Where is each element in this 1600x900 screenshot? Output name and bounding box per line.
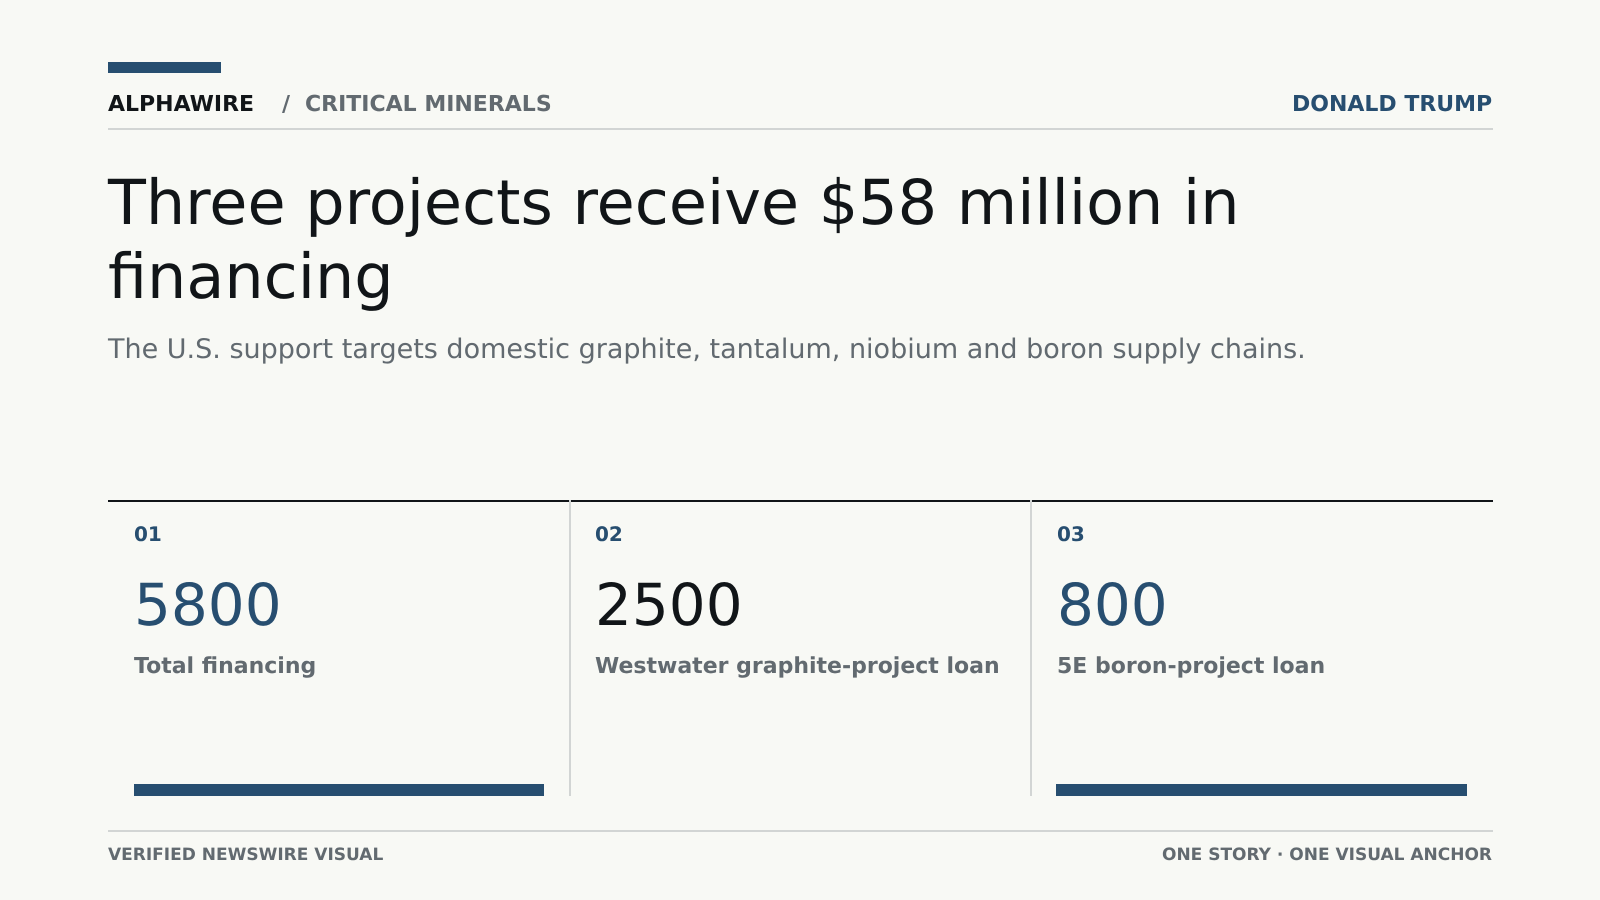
title: financing [108,240,394,313]
index 03: 03 [1057,522,1085,546]
panel: Westwater loan [595,522,1000,679]
value 5800: 5800 [134,571,282,639]
title [108,166,1240,313]
index 01: 01 [134,522,162,546]
bar [1056,784,1467,796]
header section: CRITICAL MINERALS [305,92,552,117]
header subject: DONALD TRUMP [1292,92,1492,117]
bar [134,784,544,796]
panel: 5E boron loan [1056,522,1467,796]
subtitle: The U.S. support targets domestic graphite, tantalum, niobium and boron supply chains. [108,334,1306,365]
label: Total financing [134,654,316,679]
header slash: / [282,92,290,117]
label: 5E boron-project loan [1057,654,1325,679]
index 02: 02 [595,522,623,546]
panel: total financing [134,522,544,796]
footer left: VERIFIED NEWSWIRE VISUAL [108,845,383,865]
value 800: 800 [1057,571,1168,639]
footer right: ONE STORY · ONE VISUAL ANCHOR [1162,845,1492,865]
title: Three projects receive $58 million in [108,166,1240,239]
header brand: ALPHAWIRE [108,92,254,117]
value 2500: 2500 [595,571,743,639]
accent bar [108,62,221,73]
label: Westwater graphite-project loan [595,654,1000,679]
